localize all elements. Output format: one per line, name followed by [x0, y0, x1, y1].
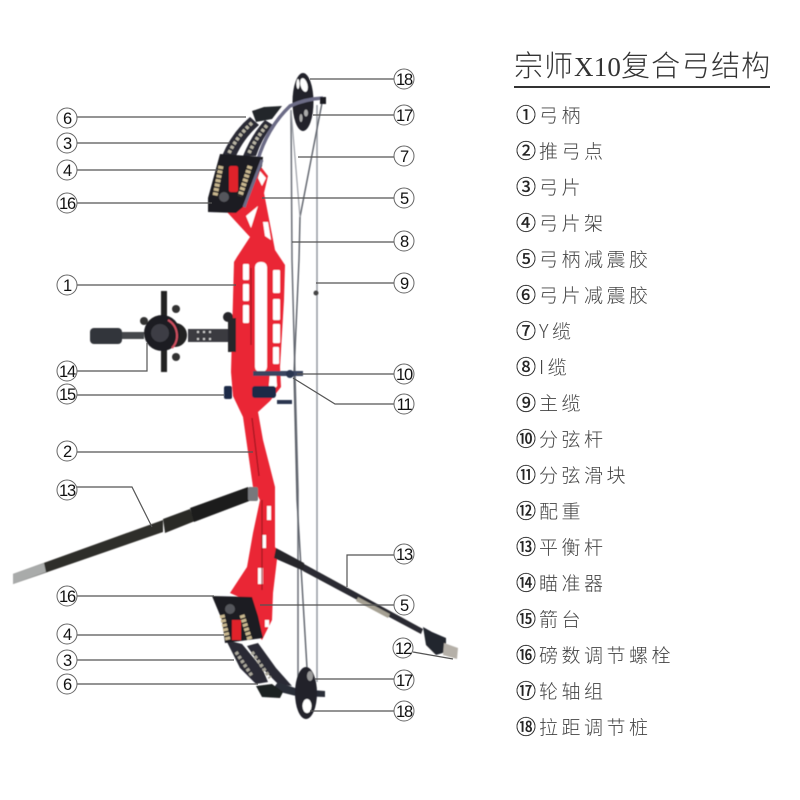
item 6: 弓片减震胶 [539, 281, 652, 308]
callout 1: 1 [63, 277, 72, 295]
item 15 [516, 603, 584, 632]
item 5: ⑤ [516, 243, 536, 272]
parts legend [516, 99, 674, 740]
item 13 [516, 531, 607, 560]
item 11: ⑪ [516, 459, 536, 488]
lower limb [226, 640, 325, 698]
item 6: ⑥ [516, 279, 536, 308]
item 10: ⑩ [516, 423, 536, 452]
item 10: 分弦杆 [539, 425, 607, 452]
callout 17: 17 [396, 107, 413, 125]
riser [227, 163, 285, 640]
callout 11 [394, 394, 414, 414]
item 3 [516, 171, 584, 200]
callout 2: 2 [63, 443, 72, 461]
callout 10: 10 [396, 366, 413, 384]
item 16: 磅数调节螺栓 [539, 641, 674, 668]
callout 16: 16 [59, 195, 76, 213]
callout 5 [394, 595, 414, 615]
sight [90, 291, 236, 372]
upper limb pocket [208, 154, 263, 213]
callout 6: 6 [63, 110, 72, 128]
callout 4: 4 [63, 626, 72, 644]
lower limb pocket [212, 596, 263, 643]
riser shading [251, 268, 262, 590]
callout 3 [57, 133, 77, 153]
callout 4 [57, 624, 77, 644]
callout 7: 7 [400, 148, 409, 166]
callout 8: 8 [400, 233, 409, 251]
item 5: 弓柄减震胶 [539, 245, 652, 272]
item 2: 推弓点 [539, 137, 607, 164]
item 7: Y缆 [539, 317, 575, 344]
item 7: ⑦ [516, 315, 536, 344]
item 8: I缆 [539, 353, 570, 380]
top cam [292, 73, 314, 131]
item 9: ⑨ [516, 387, 536, 416]
item 8: ⑧ [516, 351, 536, 380]
callout 16: 16 [59, 588, 76, 606]
callout 5 [394, 188, 414, 208]
item 14: 瞄准器 [539, 569, 607, 596]
callout 6: 6 [63, 676, 72, 694]
title: 宗师X10复合弓结构 [514, 43, 771, 85]
callout 3: 3 [63, 652, 72, 670]
callout 14: 14 [59, 363, 76, 381]
callout 13: 13 [396, 546, 413, 564]
item 15: ⑮ [516, 603, 536, 632]
item 14 [516, 567, 607, 596]
item 4 [516, 207, 607, 236]
callout 4: 4 [63, 162, 72, 180]
item 8 [516, 351, 570, 380]
item 17: ⑰ [516, 675, 536, 704]
callout 2 [57, 441, 77, 461]
item 16: ⑯ [516, 639, 536, 668]
item 12: 配重 [539, 497, 584, 524]
item 17 [516, 675, 607, 704]
cables and string [291, 103, 322, 690]
callout 4 [57, 160, 77, 180]
item 2: ② [516, 135, 536, 164]
leader lines [77, 79, 453, 711]
item 9 [516, 387, 584, 416]
bow illustration [13, 73, 458, 719]
callout 8 [394, 231, 414, 251]
item 15: 箭台 [539, 605, 584, 632]
item 18: 拉距调节桩 [539, 713, 652, 740]
item 18: ⑱ [516, 711, 536, 740]
callout 18: 18 [396, 71, 413, 89]
arrow rest and cable guard [224, 370, 303, 402]
callout 7 [394, 146, 414, 166]
item 3: 弓片 [539, 173, 584, 200]
bottom cam [295, 667, 317, 719]
item 11: 分弦滑块 [539, 461, 629, 488]
item 13: 平衡杆 [539, 533, 607, 560]
item 1 [516, 99, 584, 128]
callout 3: 3 [63, 135, 72, 153]
callout 6 [57, 108, 77, 128]
callout 15: 15 [59, 386, 76, 404]
item 14: ⑭ [516, 567, 536, 596]
callout 11: 11 [397, 396, 412, 414]
callout 12: 12 [395, 640, 412, 658]
item 1: 弓柄 [539, 101, 584, 128]
callout 9: 9 [400, 275, 409, 293]
callout 6 [57, 674, 77, 694]
callout 3 [57, 650, 77, 670]
callout 13: 13 [59, 482, 76, 500]
item 12 [516, 495, 584, 524]
item 2 [516, 135, 607, 164]
item 13: ⑬ [516, 531, 536, 560]
upper limb [222, 97, 326, 207]
item 3: ③ [516, 171, 536, 200]
callout 9 [394, 273, 414, 293]
item 1: ① [516, 99, 536, 128]
item 12: ⑫ [516, 495, 536, 524]
rear stabilizer [274, 548, 458, 659]
callout 5: 5 [400, 190, 409, 208]
callout 18: 18 [396, 703, 413, 721]
item 7 [516, 315, 575, 344]
item 4: ④ [516, 207, 536, 236]
item 17: 轮轴组 [539, 677, 607, 704]
riser windows [243, 171, 280, 627]
front stabilizer [13, 487, 258, 584]
item 10 [516, 423, 607, 452]
callout 17: 17 [396, 672, 413, 690]
item 4: 弓片架 [539, 209, 607, 236]
callout 1 [57, 275, 77, 295]
item 9: 主缆 [539, 389, 584, 416]
callout 5: 5 [400, 597, 409, 615]
